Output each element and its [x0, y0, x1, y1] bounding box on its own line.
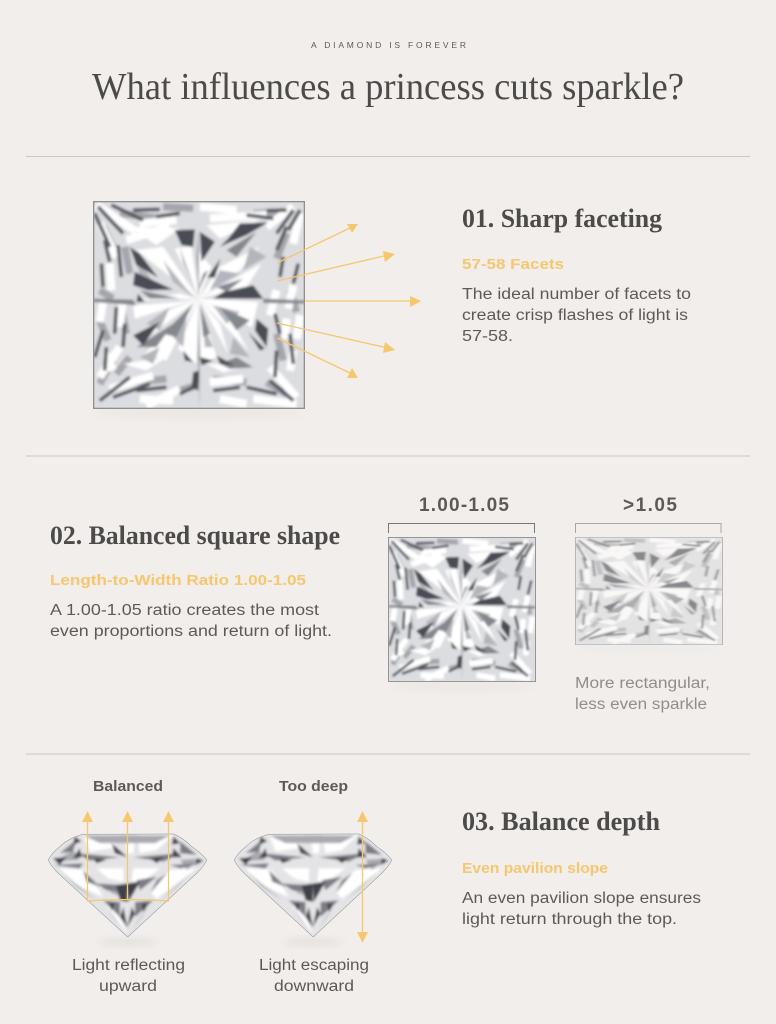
caption: balanced: Light reflecting [72, 957, 185, 974]
caption: too deep: Light escaping [259, 957, 369, 974]
panel: sharp faceting [93, 201, 691, 418]
panel: balanced square shape [50, 495, 723, 713]
heading: 03: 03. Balance depth [462, 807, 661, 836]
label: too deep: Too deep [279, 779, 348, 795]
body text: ratio [50, 602, 332, 640]
bracket: greater than 1.05 [576, 524, 721, 533]
subheading: ratio: Length-to-Width Ratio 1.00-1.05 [50, 572, 306, 589]
caption: too deep [259, 957, 369, 995]
icon: too deep diamond [232, 831, 395, 944]
icon: square diamond [388, 537, 536, 690]
body text: ratio: even proportions and return of light. [50, 623, 332, 640]
body text: facets: The ideal number of facets to [462, 286, 691, 303]
body text: facets: 57-58. [462, 328, 513, 345]
caption: rectangular: less even sparkle [575, 696, 707, 713]
title: What influences a princess cuts sparkle? [92, 66, 684, 108]
label: 1.00-1.05: 1.00-1.05 [419, 495, 509, 516]
arrows: light reflecting upward [82, 811, 174, 901]
heading: 02: 02. Balanced square shape [50, 521, 340, 550]
eyebrow text: A DIAMOND IS FOREVER [311, 40, 466, 50]
panel: balance depth [46, 779, 701, 995]
arrow: light escaping downward [357, 811, 368, 943]
caption: rectangular: More rectangular, [575, 675, 710, 692]
subheading: facets: 57-58 Facets [462, 256, 564, 273]
subheading: pavilion: Even pavilion slope [462, 860, 608, 877]
icon: rectangular diamond [575, 537, 723, 652]
caption: balanced: upward [99, 978, 157, 995]
bracket: 1.00-1.05 [388, 524, 534, 533]
body text: pavilion [462, 890, 701, 928]
heading: 01: 01. Sharp faceting [462, 204, 662, 233]
icon: balanced diamond [46, 831, 210, 944]
body text: pavilion: An even pavilion slope ensures [462, 890, 701, 907]
body text: ratio: A 1.00-1.05 ratio creates the most [50, 602, 320, 619]
label: balanced: Balanced [93, 779, 163, 795]
body text: pavilion: light return through the top. [462, 911, 677, 928]
caption: too deep: downward [274, 978, 354, 995]
body text: facets: create crisp flashes of light is [462, 307, 688, 324]
caption: balanced [72, 957, 185, 995]
arrows: light rays [277, 224, 421, 378]
body text: facets [462, 286, 691, 345]
label: greater than 1.05: >1.05 [623, 495, 677, 516]
icon: princess cut diamond [93, 201, 305, 418]
caption: rectangular [575, 675, 710, 713]
